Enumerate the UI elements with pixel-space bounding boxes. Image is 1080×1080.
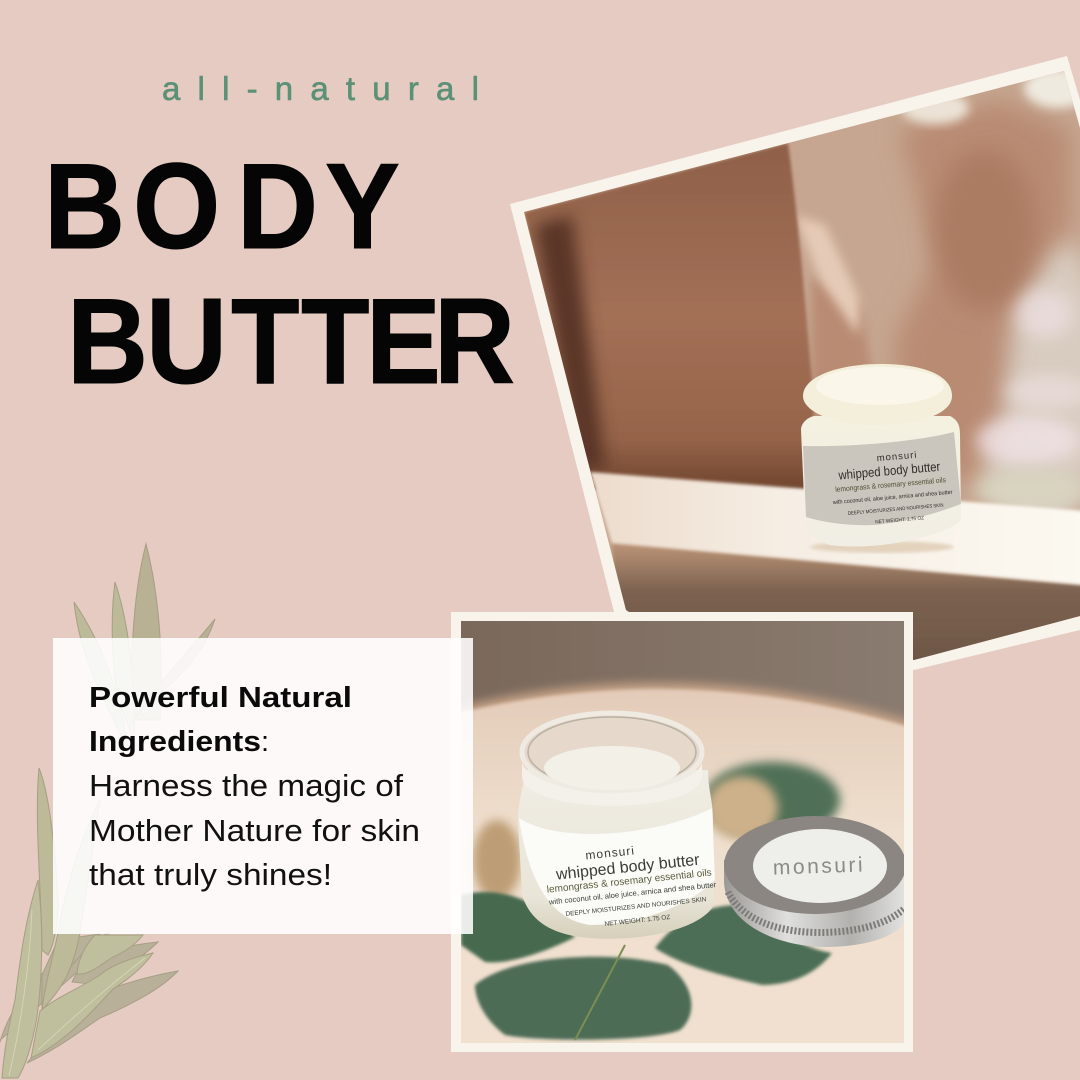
decorative leaf sprig — [0, 544, 215, 1078]
product jar — [801, 364, 961, 553]
jar label — [803, 432, 961, 525]
product jar: lemongrass & rosemary essential oils — [835, 475, 946, 494]
card heading — [89, 682, 352, 758]
tilted photo: jar on bathtub edge — [500, 50, 1080, 680]
open jar: monsuri — [585, 843, 636, 862]
metal lid: monsuri — [773, 853, 865, 880]
photo scene — [524, 71, 1080, 660]
product jar: DEEPLY MOISTURIZES AND NOURISHES SKIN — [848, 503, 944, 517]
open jar: lemongrass & rosemary essential oils — [546, 867, 712, 896]
open jar: whipped body butter — [554, 852, 701, 884]
lower photo frame — [451, 612, 913, 1052]
product jar: with coconut oil, aloe juice, arnica and shea butter — [832, 490, 953, 506]
open jar — [518, 713, 720, 939]
lower photo: open jar, lid and eucalyptus — [440, 612, 925, 1052]
product jar: monsuri — [876, 450, 918, 464]
card heading: Powerful Natural — [89, 682, 352, 714]
lower photo scene — [440, 621, 925, 1043]
open jar: DEEPLY MOISTURIZES AND NOURISHES SKIN — [565, 896, 707, 918]
photo frame — [510, 56, 1080, 670]
text card — [53, 638, 473, 934]
title: Body Butter: BODY — [44, 138, 400, 274]
metal lid — [724, 816, 906, 947]
open jar: NET WEIGHT: 1.75 OZ — [604, 914, 671, 928]
title: Body Butter — [44, 138, 515, 409]
open jar: with coconut oil, aloe juice, arnica and shea butter — [547, 880, 717, 907]
card body text: that truly shines! — [89, 857, 332, 892]
product jar: whipped body butter — [837, 459, 941, 483]
product jar: NET WEIGHT: 1.75 OZ — [875, 515, 924, 526]
card body text: Mother Nature for skin — [89, 813, 420, 848]
card body text — [89, 768, 420, 892]
jar label — [519, 808, 715, 925]
card background — [53, 638, 473, 934]
title: Body Butter: BUTTER — [67, 273, 515, 409]
card body text: Harness the magic of — [89, 768, 403, 803]
card heading: Ingredients : — [89, 726, 269, 758]
tagline: all-natural: all-natural — [162, 70, 496, 107]
